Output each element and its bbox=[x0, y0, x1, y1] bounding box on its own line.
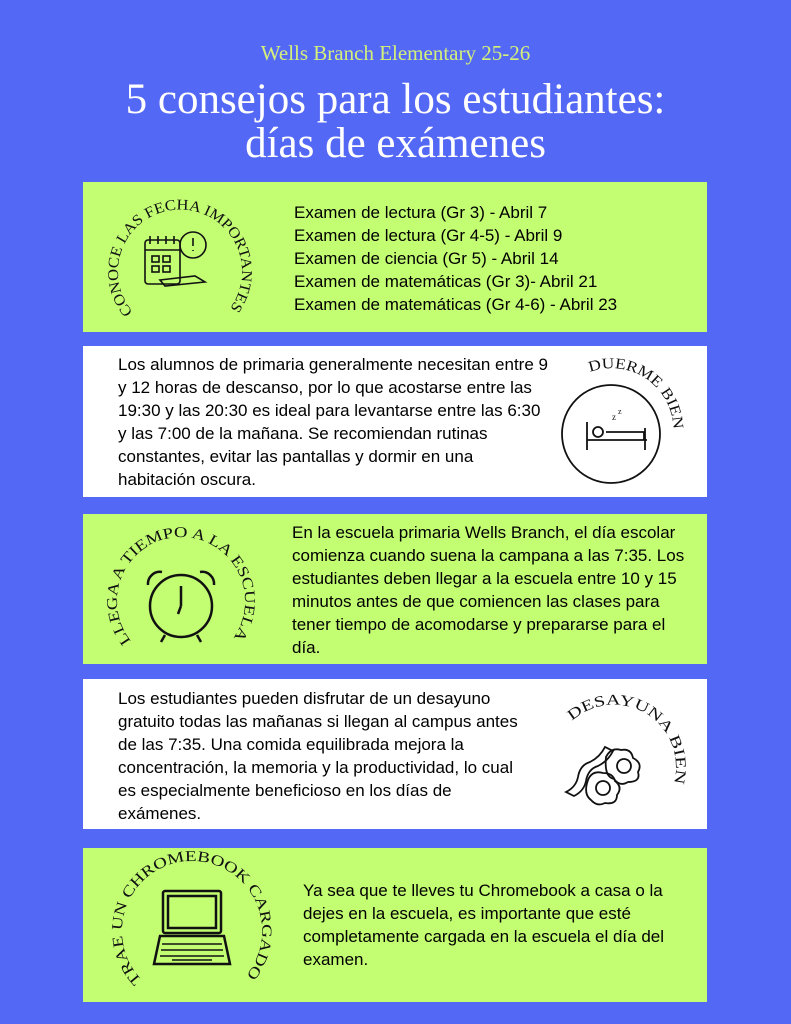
icon: sleep bbox=[561, 358, 684, 484]
icon: calendar label: CONOCE LAS FECHA IMPORTANTES bbox=[108, 200, 252, 316]
title bbox=[126, 76, 665, 167]
icon: laptop: TRAE UN CHROMEBOOK CARGADO bbox=[112, 851, 272, 986]
text: chromebook: Ya sea que te lleves tu Chromebook a casa o la dejes en la escuela, es importante que esté completamente cargada en la escuela el día del examen. bbox=[303, 881, 664, 969]
text: breakfast: Los estudiantes pueden disfrutar de un desayuno gratuito todas las mañanas si llegan al campus antes de las 7:35. Una comida equilibrada mejora la concentración, la memoria y la productividad, lo cual es especialmente beneficioso en los días de exámenes. bbox=[118, 689, 518, 823]
panel: sleep bbox=[83, 346, 707, 497]
panel: arrive on time bbox=[83, 514, 707, 664]
panel: chromebook bbox=[83, 848, 707, 1002]
icon: sleep: z bbox=[612, 412, 616, 422]
icon: sleep: DUERME BIEN bbox=[588, 358, 684, 428]
text: dates: Examen de matemáticas (Gr 4-6) - Abril 23 bbox=[294, 295, 617, 314]
text: arrive: En la escuela primaria Wells Branch, el día escolar comienza cuando suena la campana a las 7:35. Los estudiantes deben llegar a la escuela entre 10 y 15 minutos antes de que comiencen las clases para tener tiempo de acomodarse y prepararse para el día. bbox=[292, 523, 684, 657]
text: dates: Examen de ciencia (Gr 5) - Abril 14 bbox=[294, 249, 559, 268]
title: días de exámenes bbox=[245, 120, 546, 167]
title: 5 consejos para los estudiantes: bbox=[126, 76, 665, 123]
text: dates: Examen de lectura (Gr 3) - Abril 7 bbox=[294, 203, 547, 222]
panel: breakfast bbox=[83, 679, 707, 829]
icon: clock: LLEGA A TIEMPO A LA ESCUELA bbox=[107, 527, 256, 646]
subtitle: Wells Branch Elementary 25-26 bbox=[261, 41, 530, 65]
text: dates: Examen de lectura (Gr 4-5) - Abril 9 bbox=[294, 226, 562, 245]
icon: breakfast: DESAYUNA BIEN bbox=[566, 694, 686, 784]
text: dates: Examen de matemáticas (Gr 3)- Abril 21 bbox=[294, 272, 597, 291]
panel: dates bbox=[83, 182, 707, 332]
text: dates bbox=[294, 203, 617, 314]
text: sleep: Los alumnos de primaria generalmente necesitan entre 9 y 12 horas de descanso, por lo que acostarse entre las 19:30 y las 20:30 es ideal para levantarse entre las 6:30 y las 7:00 de la mañana. Se recomiendan rutinas constantes, evitar las pantallas y dormir en una habitación oscura. bbox=[118, 355, 548, 489]
icon: sleep: z bbox=[618, 407, 622, 416]
